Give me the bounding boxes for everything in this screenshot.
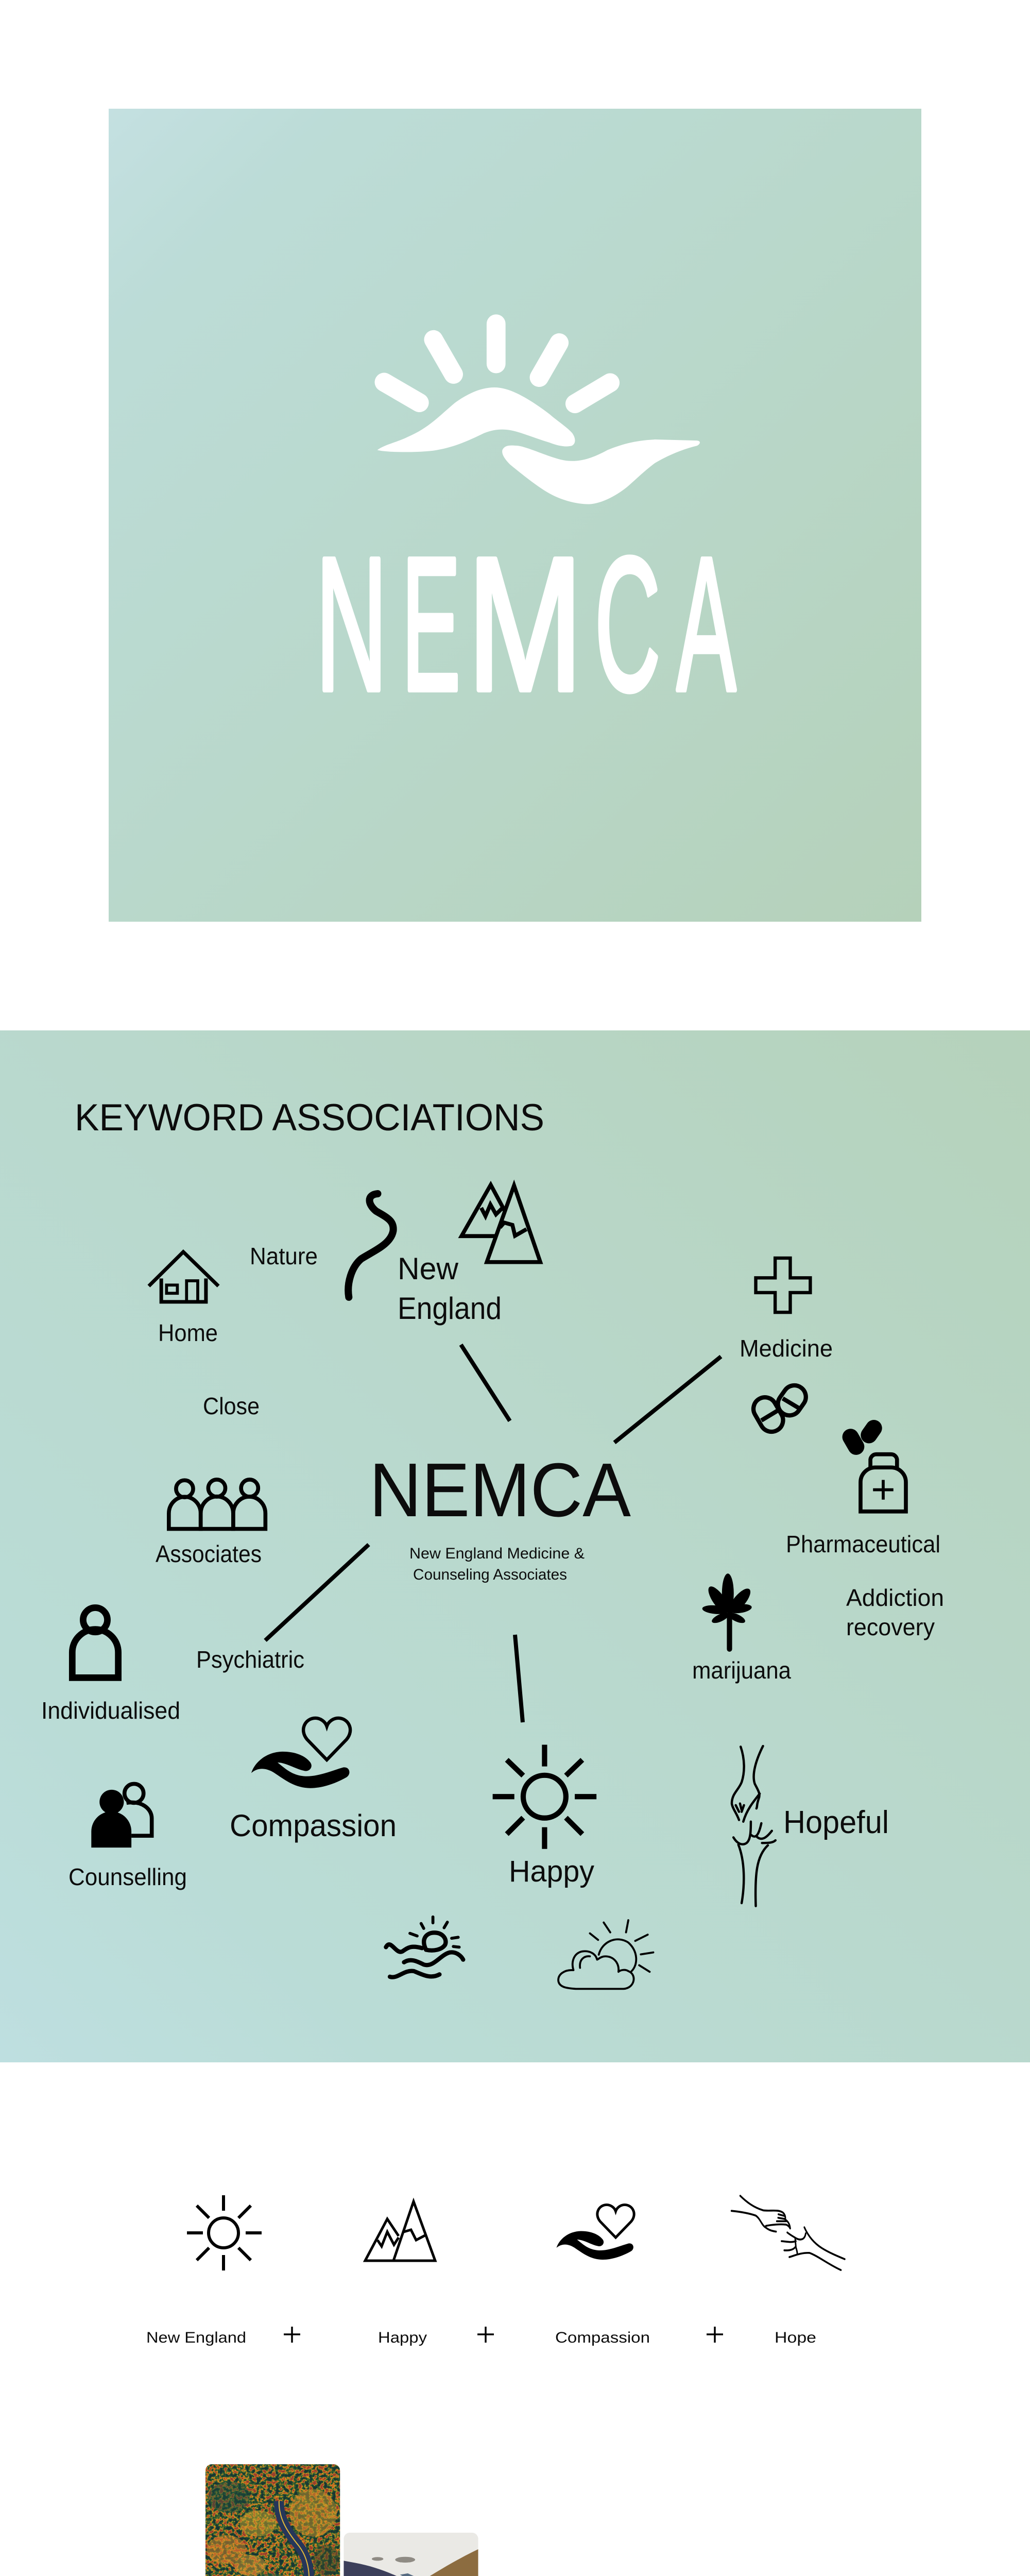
label: hope: Hope (775, 2329, 816, 2346)
label: compassion: Compassion (230, 1808, 397, 1843)
label: addiction recovery (846, 1584, 944, 1640)
label: compassion: Compassion (555, 2329, 650, 2346)
label: individualised: Individualised (41, 1697, 180, 1724)
icon: sun small (187, 2195, 262, 2270)
logo wordmark: N (316, 518, 387, 731)
panel: keyword associations (0, 1030, 1030, 2062)
icon: counselling pair (91, 1784, 152, 1848)
label: new england: New England (146, 2329, 246, 2346)
icon: hand holding heart (251, 1718, 350, 1788)
brand name expansion: New England Medicine & (409, 1545, 585, 1562)
logo wordmark: M (467, 518, 583, 731)
plus sign (707, 2327, 723, 2343)
label: home: Home (158, 1319, 218, 1346)
icon: sunrise over waves (386, 1917, 463, 1977)
label: close: Close (203, 1393, 260, 1419)
central brand name: NEMCA (369, 1448, 631, 1533)
icon: mountains (461, 1185, 540, 1262)
label: happy: Happy (509, 1855, 594, 1888)
icon: sun behind cloud (558, 1920, 654, 1989)
icon: pills outline (749, 1381, 811, 1436)
photo: mountain lake (342, 2533, 478, 2576)
heading: KEYWORD ASSOCIATIONS (75, 1097, 544, 1139)
photo: autumn forest road (205, 2464, 340, 2576)
icon: three associates (169, 1480, 265, 1529)
label: marijuana: marijuana (692, 1657, 791, 1684)
panel: white logo on gradient: A (677, 518, 736, 731)
label: psychiatric: Psychiatric (196, 1646, 304, 1673)
connector lines (265, 1345, 721, 1722)
brand name expansion (409, 1545, 585, 1583)
label: addiction recovery: Addiction (846, 1584, 944, 1611)
icon: mountains small (365, 2201, 435, 2261)
logo mark: sun rays and waves (377, 324, 700, 504)
label: addiction recovery: recovery (846, 1614, 935, 1640)
icon: reaching hands vertical (732, 1746, 776, 1906)
logo wordmark: E (402, 518, 460, 731)
label: counselling: Counselling (68, 1863, 187, 1890)
icon: individual person (72, 1608, 118, 1677)
label: nature: Nature (250, 1243, 318, 1269)
plus sign (477, 2327, 494, 2343)
brand name expansion: Counseling Associates (413, 1566, 567, 1583)
label: new england: England (398, 1291, 502, 1326)
logo wordmark: C (595, 518, 660, 731)
section: imagery and final logo (205, 2464, 478, 2576)
label: pharmaceutical: Pharmaceutical (786, 1531, 940, 1557)
icon: winding road (348, 1194, 393, 1297)
panel: white logo on gradient (109, 109, 921, 922)
panel background (109, 109, 921, 922)
icon: sun (493, 1745, 596, 1849)
label: hopeful: Hopeful (783, 1805, 889, 1840)
icon: medicine bottle with pills (839, 1417, 906, 1512)
label: medicine: Medicine (740, 1335, 833, 1362)
panel background (0, 1030, 1030, 2062)
icon: hand and heart small (556, 2205, 634, 2260)
label: new england (398, 1251, 502, 1326)
icon: medical cross (756, 1258, 810, 1312)
section: concept equation (146, 2195, 845, 2346)
icon: house (149, 1252, 218, 1302)
label: new england: New (398, 1251, 459, 1286)
label: associates: Associates (156, 1540, 262, 1567)
label: happy: Happy (378, 2329, 427, 2346)
plus sign (284, 2327, 300, 2343)
icon: cannabis leaf (702, 1573, 754, 1649)
icon: hands small (731, 2196, 845, 2270)
